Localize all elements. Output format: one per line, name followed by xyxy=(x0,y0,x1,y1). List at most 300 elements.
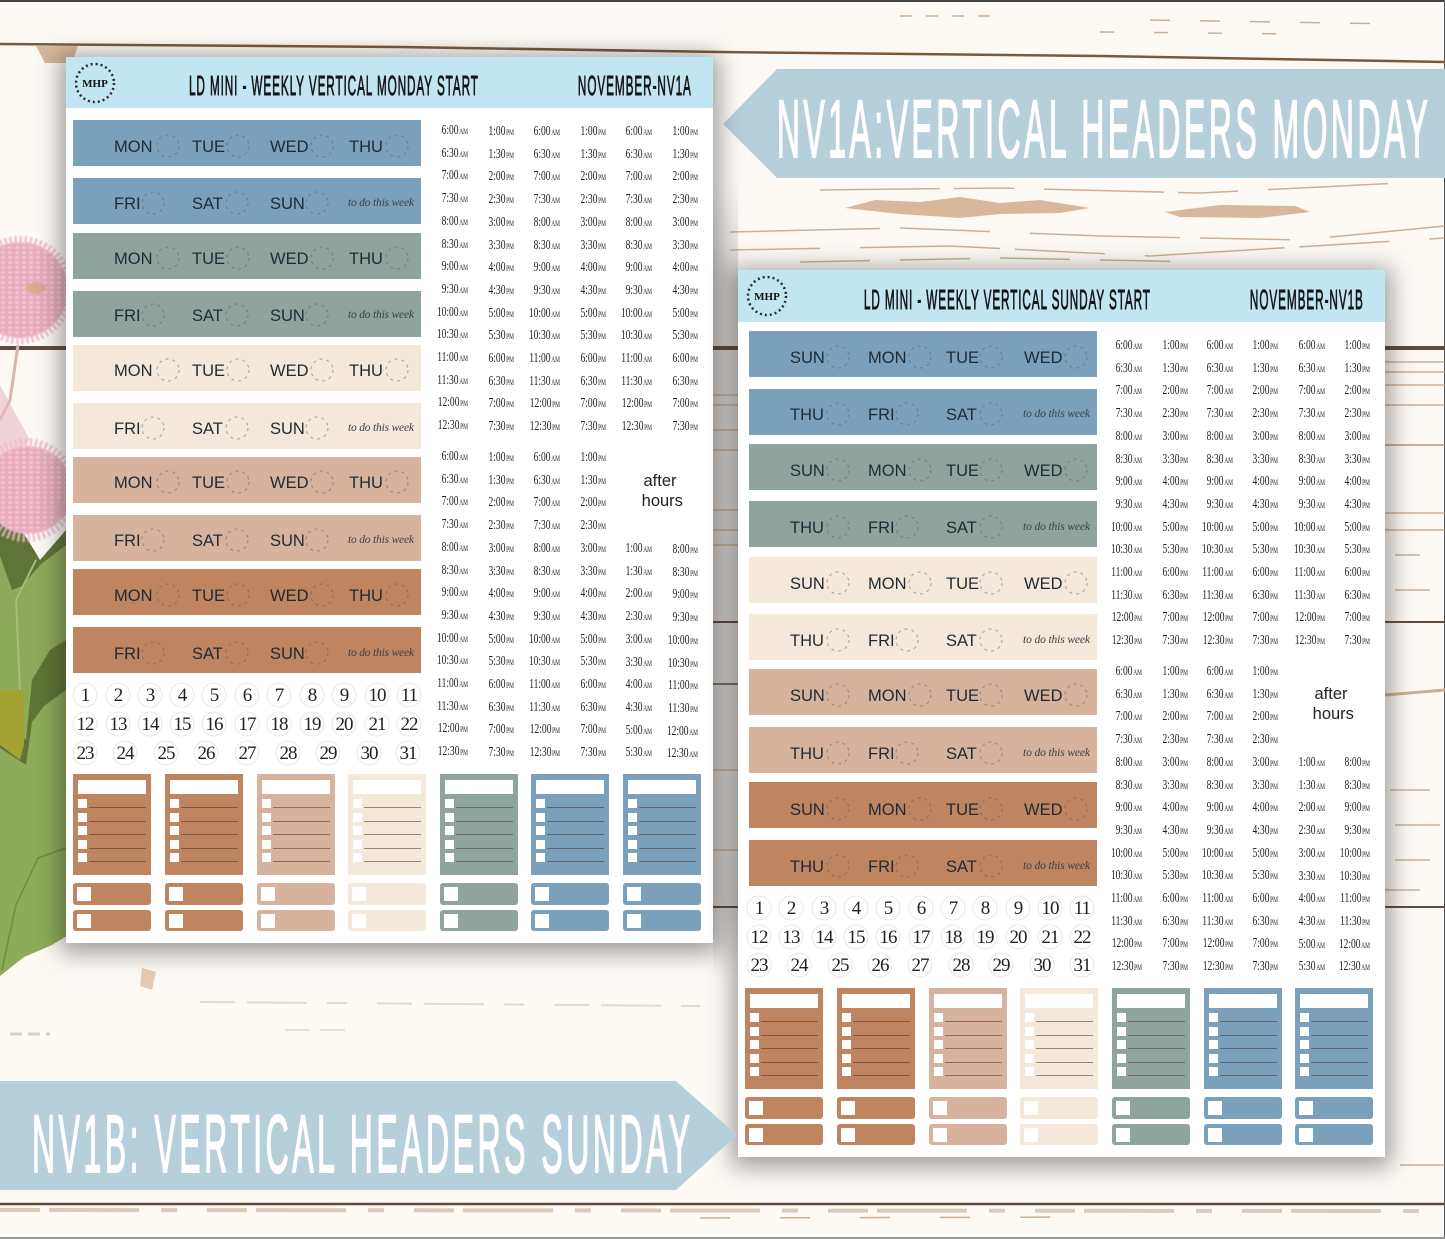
date number stickers: 1 xyxy=(755,898,764,919)
panel: sheet B, Sunday start: 7:00PM xyxy=(1253,610,1278,625)
date number stickers: 12 xyxy=(76,714,94,735)
panel: sheet B, Sunday start: 4:00AM xyxy=(1299,891,1325,906)
panel: sheet B, Sunday start: 4:00PM xyxy=(1163,474,1188,489)
icon: leaf upper xyxy=(0,545,66,740)
panel: sheet B, Sunday start: 7:30AM xyxy=(1299,406,1325,421)
panel: sheet A, Monday start: 7:00AM xyxy=(626,169,652,184)
panel: sheet A, Monday start: 2:00PM xyxy=(489,495,514,510)
panel: sheet A, Monday start: 5:30PM xyxy=(581,654,606,669)
after hours label xyxy=(1313,685,1354,722)
panel: sheet B, Sunday start: 12:30PM xyxy=(1203,959,1233,974)
header strip: brown Friday row: SUN xyxy=(270,645,305,663)
header strip: cream Monday row: TUE xyxy=(192,362,225,380)
panel: sheet A, Monday start: 6:00PM xyxy=(581,351,606,366)
panel: sheet B, Sunday start: 9:30AM xyxy=(1299,497,1325,512)
panel: sheet B, Sunday start: 5:00PM xyxy=(1163,846,1188,861)
panel: sheet A, Monday start: 7:30AM xyxy=(442,517,468,532)
panel: sheet A, Monday start: 3:00PM xyxy=(489,215,514,230)
panel: sheet B, Sunday start: 1:30PM xyxy=(1163,687,1188,702)
header strip: blue Sunday row: MON xyxy=(868,349,906,367)
panel: sheet A, Monday start: 6:00AM xyxy=(534,450,560,465)
panel: sheet A, Monday start: 4:00PM xyxy=(581,586,606,601)
date number stickers: 17 xyxy=(238,714,256,735)
panel: sheet A, Monday start: 2:00PM xyxy=(581,495,606,510)
panel: sheet B, Sunday start: 8:30AM xyxy=(1116,452,1142,467)
panel: sheet B, Sunday start: 2:00PM xyxy=(1253,383,1278,398)
panel: sheet A, Monday start: 2:30PM xyxy=(581,192,606,207)
panel: sheet B, Sunday start: 5:00AM xyxy=(1299,937,1325,952)
header strip: blue Sunday row: TUE xyxy=(946,349,979,367)
panel: sheet A, Monday start: 1:30PM xyxy=(489,147,514,162)
panel: sheet B, Sunday start: 1:00PM xyxy=(1253,664,1278,679)
header strip: cream Thursday row: SAT xyxy=(946,632,977,650)
header strip: green Thursday row: SAT xyxy=(946,519,977,537)
panel: sheet B, Sunday start: 2:00PM xyxy=(1163,709,1188,724)
date number stickers: 8 xyxy=(308,685,317,706)
panel: sheet A, Monday start: 6:30AM xyxy=(534,147,560,162)
header strip: green Friday row: to do this week xyxy=(348,309,415,321)
header strip: green Sunday row: MON xyxy=(868,462,906,480)
panel: sheet A, Monday start: 5:00PM xyxy=(581,632,606,647)
panel: sheet B, Sunday start: 5:30PM xyxy=(1345,542,1370,557)
panel: sheet B, Sunday start: 3:30PM xyxy=(1253,778,1278,793)
panel: sheet A, Monday start: 2:30AM xyxy=(626,609,652,624)
panel: sheet B, Sunday start: 3:00PM xyxy=(1253,429,1278,444)
panel: sheet A, Monday start: 6:30PM xyxy=(489,700,514,715)
panel: sheet A, Monday start: 3:00PM xyxy=(581,215,606,230)
panel: sheet B, Sunday start: 4:30PM xyxy=(1163,497,1188,512)
date number stickers: 15 xyxy=(174,714,191,735)
date number stickers: 23 xyxy=(750,955,768,976)
panel: sheet B, Sunday start: 8:00AM xyxy=(1207,755,1233,770)
panel: sheet B, Sunday start: 4:30AM xyxy=(1299,914,1325,929)
header strip: cream Thursday row: to do this week xyxy=(1023,634,1091,646)
panel: sheet A, Monday start: 5:00PM xyxy=(673,306,698,321)
header strip: tan Sunday row: SUN xyxy=(790,687,825,705)
header strip: brown Sunday row: WED xyxy=(1024,801,1063,819)
date number stickers: 8 xyxy=(981,898,990,919)
panel: sheet B, Sunday start: 2:30AM xyxy=(1299,823,1325,838)
panel: sheet A, Monday start: 7:30PM xyxy=(581,745,606,760)
header strip: blue Friday row xyxy=(73,178,421,224)
panel: sheet A, Monday start: 5:30PM xyxy=(489,328,514,343)
panel: sheet B, Sunday start: 6:00PM xyxy=(1163,565,1188,580)
panel: sheet B, Sunday start: 2:30PM xyxy=(1163,406,1188,421)
panel: sheet B, Sunday start: 5:30AM xyxy=(1299,959,1325,974)
header strip: green Friday row: SUN xyxy=(270,307,305,325)
panel: sheet A, Monday start: 1:00PM xyxy=(489,450,514,465)
panel: sheet B, Sunday start: 6:30PM xyxy=(1253,588,1278,603)
panel: sheet A, Monday start: 9:30PM xyxy=(673,610,698,625)
panel: sheet B, Sunday start: 5:00PM xyxy=(1253,520,1278,535)
header strip: tan Friday row: SUN xyxy=(270,532,305,550)
panel: sheet A, Monday start: 3:30PM xyxy=(489,564,514,579)
panel: sheet A, Monday start: 9:30AM xyxy=(626,283,652,298)
header strip: green Monday row: WED xyxy=(270,250,309,268)
date number stickers: 3 xyxy=(820,898,829,919)
panel: sheet A, Monday start: 2:30PM xyxy=(673,192,698,207)
panel: sheet B, Sunday start: 5:30PM xyxy=(1253,868,1278,883)
panel: sheet B, Sunday start: 7:00AM xyxy=(1116,383,1142,398)
date number stickers: 30 xyxy=(360,743,378,764)
header strip: brown Monday row xyxy=(73,569,421,615)
panel: sheet A, Monday start: 2:30PM xyxy=(489,518,514,533)
panel: sheet A, Monday start: 6:30PM xyxy=(673,374,698,389)
date number stickers: 10 xyxy=(1042,898,1059,919)
header strip: cream Sunday row: MON xyxy=(868,575,906,593)
date number stickers: 24 xyxy=(790,955,809,976)
panel: sheet A, Monday start: 6:30PM xyxy=(581,374,606,389)
panel: sheet B, Sunday start: 6:00PM xyxy=(1163,891,1188,906)
panel: sheet B, Sunday start: 4:00PM xyxy=(1345,474,1370,489)
panel: sheet A, Monday start: 3:30PM xyxy=(673,238,698,253)
header strip: green Friday row: SAT xyxy=(192,307,223,325)
header strip: green Monday row xyxy=(73,233,421,279)
panel: sheet B, Sunday start: 7:00AM xyxy=(1299,383,1325,398)
panel: sheet A, Monday start: 6:00AM xyxy=(442,449,468,464)
panel: sheet A, Monday start: 10:30AM xyxy=(621,328,652,343)
date number stickers: 5 xyxy=(210,685,219,706)
date number stickers: 16 xyxy=(206,714,223,735)
panel: sheet B, Sunday start: 12:30PM xyxy=(1203,633,1233,648)
panel: sheet A, Monday start: 2:00PM xyxy=(489,169,514,184)
panel: sheet B, Sunday start: 6:00AM xyxy=(1116,664,1142,679)
panel: sheet A, Monday start: 2:30PM xyxy=(581,518,606,533)
header strip: tan Monday row: WED xyxy=(270,474,309,492)
panel: sheet B, Sunday start: 4:30PM xyxy=(1253,823,1278,838)
date number stickers: 17 xyxy=(912,927,930,948)
panel: sheet B, Sunday start: 7:00PM xyxy=(1163,610,1188,625)
panel: sheet B, Sunday start: 6:30AM xyxy=(1116,361,1142,376)
date number stickers: 26 xyxy=(872,955,889,976)
header strip: green Thursday row: FRI xyxy=(868,519,895,537)
panel: sheet A, Monday start: 9:30AM xyxy=(442,608,468,623)
date number stickers: 10 xyxy=(368,685,386,706)
panel: sheet B, Sunday start: 10:30AM xyxy=(1111,868,1142,883)
date number stickers: 2 xyxy=(787,898,796,919)
panel: sheet A, Monday start: 7:00PM xyxy=(489,722,514,737)
time stickers xyxy=(1111,338,1370,974)
panel: sheet B, Sunday start: 10:00PM xyxy=(1340,846,1370,861)
panel: sheet B, Sunday start: 6:30PM xyxy=(1163,588,1188,603)
panel: sheet B, Sunday start: 8:30AM xyxy=(1207,778,1233,793)
panel: sheet A, Monday start: 7:30AM xyxy=(534,518,560,533)
panel: sheet A, Monday start: 3:00PM xyxy=(673,215,698,230)
panel: sheet A, Monday start: 7:30PM xyxy=(489,419,514,434)
panel: sheet A, Monday start: 11:00AM xyxy=(621,351,652,366)
panel: sheet A, Monday start: 6:30AM xyxy=(442,472,468,487)
panel: sheet B, Sunday start: 7:30PM xyxy=(1345,633,1370,648)
panel: sheet B, Sunday start: 1:30PM xyxy=(1345,361,1370,376)
panel: sheet B, Sunday start: 4:30PM xyxy=(1163,823,1188,838)
panel: sheet B, Sunday start: 3:30AM xyxy=(1299,869,1325,884)
panel: sheet B, Sunday start: 7:30AM xyxy=(1116,406,1142,421)
header strip: tan Sunday row: TUE xyxy=(946,687,979,705)
top banner: NV1A: NV1A:VERTICAL HEADERS MONDAY xyxy=(777,85,1428,175)
icon: leaf lower xyxy=(0,690,70,976)
date number stickers: 15 xyxy=(848,927,865,948)
panel: sheet A, Monday start: 7:00AM xyxy=(442,168,468,183)
panel: sheet A, Monday start: 8:30AM xyxy=(626,238,652,253)
header strip: brown Sunday row: MON xyxy=(868,801,906,819)
header strip: blue Monday row xyxy=(73,120,421,166)
header strip: blue Sunday row: SUN xyxy=(790,349,825,367)
panel: sheet A, Monday start: 4:30AM xyxy=(626,700,652,715)
panel: sheet A, Monday start: 3:00PM xyxy=(581,541,606,556)
panel: sheet B, Sunday start: 7:30PM xyxy=(1163,959,1188,974)
panel: sheet A, Monday start: 10:00AM xyxy=(437,631,468,646)
panel: sheet B, Sunday start: 6:30PM xyxy=(1163,914,1188,929)
checklist stickers xyxy=(745,988,1373,1145)
panel: sheet B, Sunday start: 8:00AM xyxy=(1116,755,1142,770)
panel: sheet A, Monday start: 9:00AM xyxy=(442,259,468,274)
panel: sheet A, Monday start: 7:00AM xyxy=(442,494,468,509)
panel: sheet B, Sunday start: 2:30PM xyxy=(1163,732,1188,747)
header strip: green Sunday row: WED xyxy=(1024,462,1063,480)
date number stickers: 6 xyxy=(243,685,252,706)
panel: sheet A, Monday start: 11:30AM xyxy=(621,374,652,389)
header strip: tan Monday row xyxy=(73,457,421,503)
date number stickers: 4 xyxy=(852,898,862,919)
header band: NOVEMBER-NV1B xyxy=(1250,284,1363,316)
date number stickers: 22 xyxy=(400,714,418,735)
header strip: cream Friday row: to do this week xyxy=(348,422,415,434)
date number stickers: 4 xyxy=(178,685,188,706)
header strip: brown Monday row: MON xyxy=(114,587,152,605)
header band: MHP xyxy=(754,291,780,303)
header strip: tan Monday row: THU xyxy=(349,474,383,492)
header strip: tan Monday row: TUE xyxy=(192,474,225,492)
icon: pink flower bottom xyxy=(0,443,73,537)
panel: sheet B, Sunday start: 4:00PM xyxy=(1253,800,1278,815)
panel: sheet A, Monday start: 3:30PM xyxy=(581,238,606,253)
panel: sheet B, Sunday start: 2:00AM xyxy=(1299,800,1325,815)
date number stickers: 27 xyxy=(238,743,256,764)
panel: sheet A, Monday start: 1:30PM xyxy=(581,147,606,162)
header strip: brown Sunday row xyxy=(749,782,1097,828)
header strip: green Monday row: TUE xyxy=(192,250,225,268)
panel: sheet B, Sunday start: 12:30PM xyxy=(1112,959,1142,974)
panel: sheet B, Sunday start: 11:30AM xyxy=(1111,914,1142,929)
panel: sheet A, Monday start: 12:00AM xyxy=(667,724,698,739)
panel: sheet B, Sunday start: 6:00AM xyxy=(1207,338,1233,353)
panel: sheet B, Sunday start: 11:00AM xyxy=(1294,565,1325,580)
panel: sheet B, Sunday start: 12:00PM xyxy=(1295,610,1325,625)
panel: sheet A, Monday start: 4:00PM xyxy=(581,260,606,275)
panel: sheet A, Monday start: 12:00PM xyxy=(530,722,560,737)
panel: sheet A, Monday start: 8:00AM xyxy=(442,540,468,555)
header strip: brown Sunday row: TUE xyxy=(946,801,979,819)
date number stickers: 19 xyxy=(976,927,994,948)
panel: sheet B, Sunday start: 9:00PM xyxy=(1345,800,1370,815)
date number stickers: 13 xyxy=(110,714,127,735)
panel: sheet A, Monday start: 3:00AM xyxy=(626,632,652,647)
panel: sheet B, Sunday start: 8:30AM xyxy=(1207,452,1233,467)
header strip: blue Monday row: MON xyxy=(114,138,152,156)
panel: sheet A, Monday start: 12:00PM xyxy=(438,721,468,736)
date number stickers: 12 xyxy=(750,927,768,948)
panel: sheet A, Monday start: 3:30PM xyxy=(581,564,606,579)
panel: sheet B, Sunday start: 11:00AM xyxy=(1202,565,1233,580)
date number stickers: 21 xyxy=(368,714,386,735)
header strip: green Sunday row xyxy=(749,444,1097,490)
header strip: blue Thursday row: FRI xyxy=(868,406,895,424)
panel: sheet B, Sunday start: 3:00AM xyxy=(1299,846,1325,861)
panel: sheet A, Monday start: 6:30AM xyxy=(442,146,468,161)
panel: sheet B, Sunday start: 5:30PM xyxy=(1253,542,1278,557)
panel: sheet B, Sunday start: 8:30PM xyxy=(1345,778,1370,793)
panel: sheet B, Sunday start: 12:00PM xyxy=(1112,610,1142,625)
date number stickers xyxy=(747,896,1094,977)
panel: sheet B, Sunday start: 1:30PM xyxy=(1163,361,1188,376)
panel: sheet B, Sunday start: 3:30PM xyxy=(1345,452,1370,467)
header strip: green Thursday row: to do this week xyxy=(1023,521,1091,533)
panel: sheet A, Monday start: 5:00PM xyxy=(581,306,606,321)
date number stickers: 25 xyxy=(158,743,175,764)
panel: sheet B, Sunday start: 3:30PM xyxy=(1163,452,1188,467)
header strip: brown Friday row: SAT xyxy=(192,645,223,663)
panel: sheet B, Sunday start: 5:00PM xyxy=(1253,846,1278,861)
panel: sheet B, Sunday start: 10:30AM xyxy=(1111,542,1142,557)
panel: sheet A, Monday start: 10:30AM xyxy=(529,328,560,343)
panel: sheet B, Sunday start: 12:00PM xyxy=(1203,936,1233,951)
header strip: blue Sunday row: WED xyxy=(1024,349,1063,367)
panel: sheet A, Monday start: 7:00AM xyxy=(534,169,560,184)
panel: sheet A, Monday start: 10:00AM xyxy=(529,632,560,647)
header strip: tan Sunday row xyxy=(749,669,1097,715)
panel: sheet A, Monday start: 9:30AM xyxy=(534,283,560,298)
panel: sheet B, Sunday start: 1:30AM xyxy=(1299,778,1325,793)
panel: sheet A, Monday start: 12:30AM xyxy=(667,746,698,761)
date number stickers: 25 xyxy=(832,955,849,976)
panel: sheet A, Monday start: 2:00PM xyxy=(673,169,698,184)
date number stickers: 19 xyxy=(304,714,321,735)
panel: sheet A, Monday start: 2:00PM xyxy=(581,169,606,184)
header strip: blue Thursday row: THU xyxy=(790,406,824,424)
panel: sheet B, Sunday start: 12:00PM xyxy=(1112,936,1142,951)
date number stickers: 1 xyxy=(81,685,90,706)
panel: sheet B, Sunday start xyxy=(738,270,1385,1157)
header strip: cream Friday row: SAT xyxy=(192,420,223,438)
panel: sheet A, Monday start: 8:30AM xyxy=(442,237,468,252)
panel: sheet A, Monday start: 4:00PM xyxy=(489,260,514,275)
panel: sheet A, Monday start: 12:00PM xyxy=(622,396,652,411)
header strip: brown Monday row: TUE xyxy=(192,587,225,605)
panel: sheet B, Sunday start: 10:00AM xyxy=(1111,520,1142,535)
panel: sheet B, Sunday start: 3:30PM xyxy=(1163,778,1188,793)
date number stickers: 28 xyxy=(280,743,297,764)
panel: sheet B, Sunday start: 6:00AM xyxy=(1299,338,1325,353)
panel: sheet B, Sunday start: 6:30PM xyxy=(1345,588,1370,603)
header band: NOVEMBER-NV1A xyxy=(578,70,691,102)
date number stickers: 20 xyxy=(1010,927,1027,948)
header strip: cream Monday row: THU xyxy=(349,362,383,380)
panel: sheet B, Sunday start: 7:00PM xyxy=(1163,936,1188,951)
header strip: tan Thursday row xyxy=(749,727,1097,773)
panel: sheet B, Sunday start: 10:30AM xyxy=(1202,868,1233,883)
panel: sheet A, Monday start: 4:30PM xyxy=(581,609,606,624)
header strip: brown Sunday row: SUN xyxy=(790,801,825,819)
panel: sheet B, Sunday start: 12:30PM xyxy=(1295,633,1325,648)
panel: sheet B, Sunday start: 12:30PM xyxy=(1112,633,1142,648)
panel: sheet A, Monday start: 12:00PM xyxy=(438,395,468,410)
panel: sheet A, Monday start: 12:30PM xyxy=(530,419,560,434)
panel: sheet A, Monday start: 5:00AM xyxy=(626,723,652,738)
panel: sheet B, Sunday start: 11:30PM xyxy=(1340,914,1370,929)
panel: sheet A, Monday start: 5:30PM xyxy=(581,328,606,343)
header strip: cream Sunday row: TUE xyxy=(946,575,979,593)
header strip: blue Friday row: SUN xyxy=(270,195,305,213)
panel: sheet B, Sunday start: 4:30PM xyxy=(1345,497,1370,512)
panel: sheet A, Monday start: 11:30AM xyxy=(437,373,468,388)
date number stickers: 23 xyxy=(76,743,94,764)
panel: sheet B, Sunday start: 8:00AM xyxy=(1116,429,1142,444)
header strip: cream Friday row: FRI xyxy=(114,420,141,438)
panel: sheet A, Monday start: 12:30PM xyxy=(438,744,468,759)
panel: sheet A, Monday start: 8:30AM xyxy=(442,563,468,578)
after hours label: after xyxy=(1314,685,1348,703)
panel: sheet B, Sunday start: 6:30AM xyxy=(1207,687,1233,702)
date number stickers: 31 xyxy=(400,743,417,764)
panel: sheet B, Sunday start: 11:30AM xyxy=(1202,588,1233,603)
panel: sheet B, Sunday start: 7:30AM xyxy=(1207,732,1233,747)
panel: sheet A, Monday start: 1:00PM xyxy=(673,124,698,139)
header band: MHP xyxy=(82,78,108,90)
panel: sheet B, Sunday start: 7:00AM xyxy=(1116,709,1142,724)
panel: sheet B, Sunday start: 7:30PM xyxy=(1163,633,1188,648)
date number stickers xyxy=(73,683,421,765)
panel: sheet B, Sunday start: 2:00PM xyxy=(1163,383,1188,398)
panel: sheet B, Sunday start: 7:00PM xyxy=(1253,936,1278,951)
panel: sheet B, Sunday start: 7:00AM xyxy=(1207,709,1233,724)
panel: sheet A, Monday start: 6:00AM xyxy=(442,123,468,138)
panel: sheet A, Monday start: 10:30PM xyxy=(668,656,698,671)
panel: sheet B, Sunday start: 6:00PM xyxy=(1345,565,1370,580)
panel: sheet A, Monday start: 4:00AM xyxy=(626,677,652,692)
panel: sheet A, Monday start: 10:00PM xyxy=(668,633,698,648)
date number stickers: 11 xyxy=(401,685,418,706)
panel: sheet B, Sunday start: 10:00AM xyxy=(1294,520,1325,535)
panel: sheet B, Sunday start: 6:30AM xyxy=(1207,361,1233,376)
panel: sheet A, Monday start: 7:00PM xyxy=(581,722,606,737)
date number stickers: 11 xyxy=(1074,898,1091,919)
panel: sheet A, Monday start: 1:30PM xyxy=(489,473,514,488)
panel: sheet A, Monday start: 4:30PM xyxy=(581,283,606,298)
header strip: cream Thursday row: FRI xyxy=(868,632,895,650)
panel: sheet A, Monday start: 9:00PM xyxy=(673,587,698,602)
panel: sheet A, Monday start: 10:00AM xyxy=(621,306,652,321)
panel: sheet B, Sunday start: 5:30PM xyxy=(1163,542,1188,557)
panel: sheet B, Sunday start: 2:30PM xyxy=(1345,406,1370,421)
header strip: tan Sunday row: WED xyxy=(1024,687,1063,705)
panel: sheet A, Monday start: 10:30AM xyxy=(437,653,468,668)
panel: sheet A, Monday start: 8:00AM xyxy=(534,215,560,230)
after hours label: hours xyxy=(1313,704,1354,722)
header strip: blue Monday row: WED xyxy=(270,138,309,156)
panel: sheet B, Sunday start: 6:00AM xyxy=(1207,664,1233,679)
panel: sheet A, Monday start xyxy=(66,57,713,943)
header band xyxy=(738,270,1385,322)
panel: sheet B, Sunday start: 8:30AM xyxy=(1299,452,1325,467)
panel: sheet A, Monday start: 6:30AM xyxy=(626,147,652,162)
panel: sheet A, Monday start: 7:00PM xyxy=(489,396,514,411)
date number stickers: 13 xyxy=(782,927,800,948)
panel: sheet A, Monday start: 10:30AM xyxy=(437,327,468,342)
panel: sheet A, Monday start: 11:30AM xyxy=(437,699,468,714)
date number stickers: 6 xyxy=(917,898,926,919)
header strip: brown Friday row xyxy=(73,627,421,673)
panel: sheet A, Monday start: 3:30AM xyxy=(626,655,652,670)
